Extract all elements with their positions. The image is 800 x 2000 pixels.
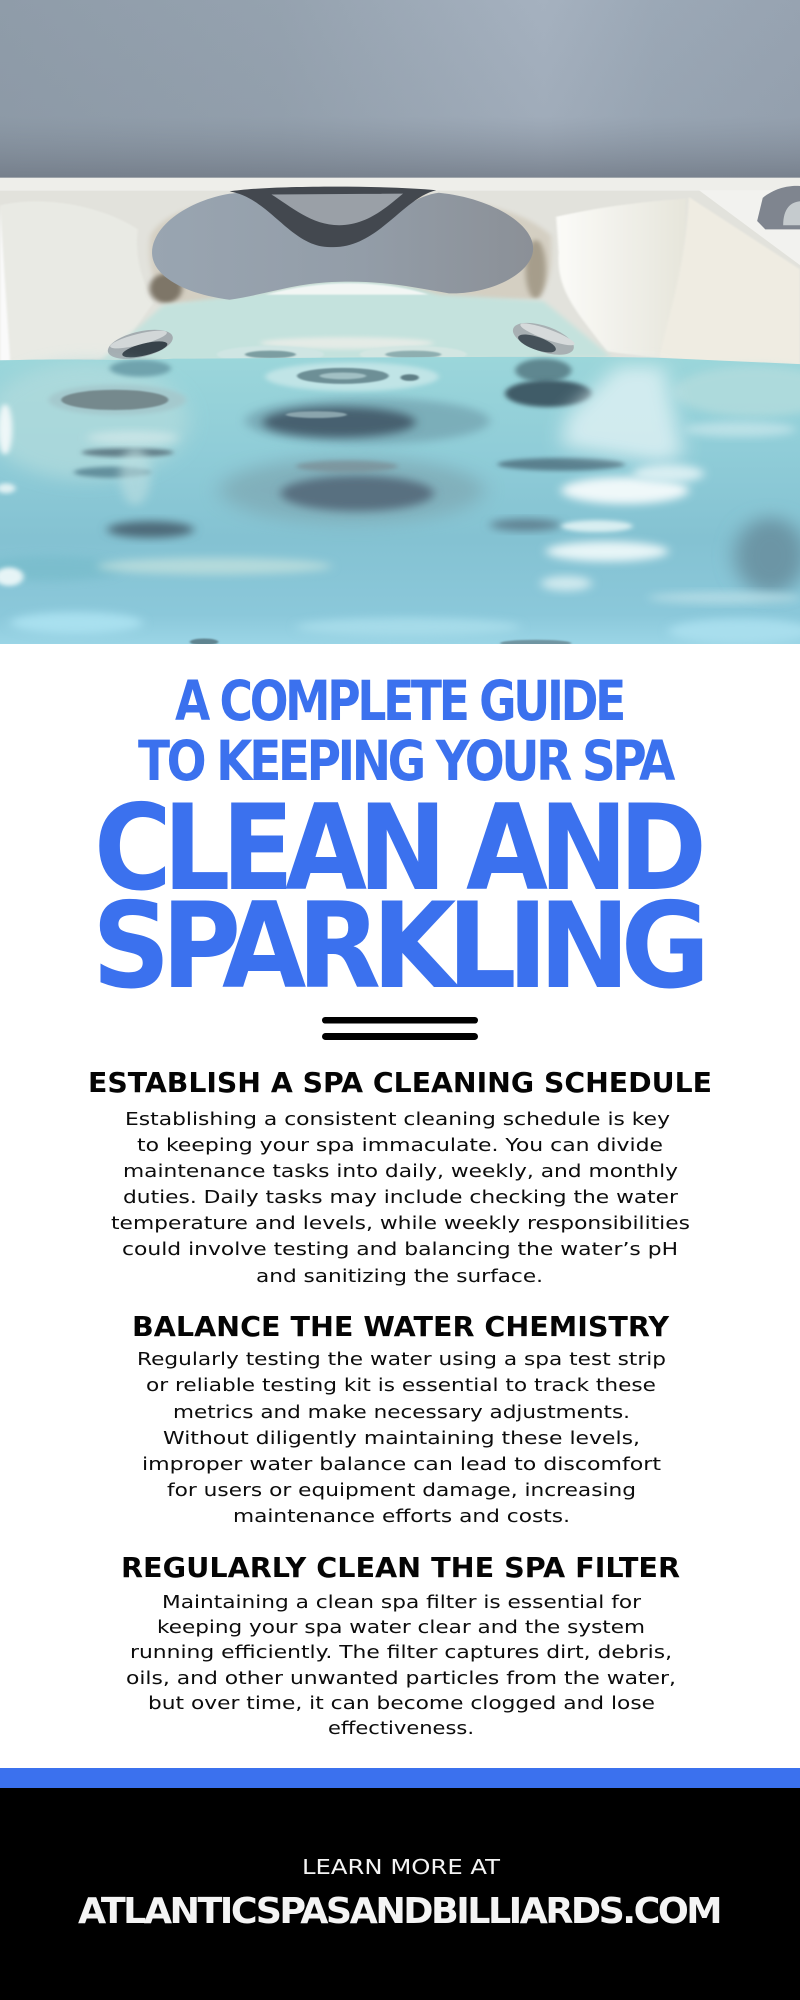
faucet fixture — [757, 186, 800, 229]
body text: Regularly testing the water using a spa test strip — [137, 1350, 666, 1370]
body text: for users or equipment damage, increasing — [167, 1481, 636, 1501]
footer background — [0, 1788, 800, 2000]
headrest — [152, 187, 533, 300]
body text — [111, 1110, 690, 1287]
double bar divider — [322, 1017, 478, 1040]
water surface — [0, 357, 800, 660]
body text: Establishing a consistent cleaning schedule is key — [125, 1110, 670, 1130]
right chrome jet — [507, 316, 579, 361]
body text: effectiveness. — [328, 1719, 474, 1739]
body text: or reliable testing kit is essential to track these — [146, 1376, 656, 1396]
body text: improper water balance can lead to discomfort — [142, 1455, 661, 1475]
body text: keeping your spa water clear and the system — [157, 1618, 645, 1638]
wall background — [0, 0, 800, 179]
learn more label: LEARN MORE AT — [302, 1855, 501, 1879]
title line: sparkling: SPARKLING — [92, 878, 702, 1016]
body text — [126, 1593, 676, 1739]
title — [92, 669, 702, 1016]
body text: running efficiently. The filter captures dirt, debris, — [130, 1643, 672, 1663]
white content panel — [0, 644, 800, 1768]
section: establish a spa cleaning schedule — [88, 1068, 712, 1287]
body text: oils, and other unwanted particles from the water, — [126, 1669, 676, 1689]
body text: maintenance tasks into daily, weekly, and monthly — [123, 1162, 678, 1182]
body text: maintenance efforts and costs. — [233, 1507, 570, 1527]
body text: could involve testing and balancing the water’s pH — [122, 1240, 678, 1260]
heading: ESTABLISH A SPA CLEANING SCHEDULE — [88, 1068, 712, 1099]
website url: ATLANTICSPASANDBILLIARDS.COM — [78, 1891, 720, 1932]
ripple rings above the waterline — [217, 346, 467, 363]
title line: clean and: CLEAN AND — [94, 780, 702, 918]
body text: Maintaining a clean spa filter is essential for — [162, 1593, 642, 1613]
heading: REGULARLY CLEAN THE SPA FILTER — [121, 1553, 680, 1584]
section: regularly clean the spa filter — [121, 1553, 680, 1739]
body text: Without diligently maintaining these levels, — [163, 1429, 640, 1449]
left chrome jet — [104, 324, 177, 365]
body text: temperature and levels, while weekly responsibilities — [111, 1214, 690, 1234]
body text: but over time, it can become clogged and lose — [148, 1694, 655, 1714]
body text: to keeping your spa immaculate. You can divide — [137, 1136, 663, 1156]
title line: to keeping your spa: TO KEEPING YOUR SPA — [138, 729, 676, 793]
section: balance the water chemistry — [132, 1312, 670, 1527]
tub shell — [0, 178, 800, 380]
body text: duties. Daily tasks may include checking the water — [123, 1188, 679, 1208]
heading: BALANCE THE WATER CHEMISTRY — [132, 1312, 670, 1343]
title line: a complete guide: A COMPLETE GUIDE — [175, 669, 623, 733]
body text: and sanitizing the surface. — [256, 1267, 543, 1287]
footer — [0, 1788, 800, 2000]
blue accent band — [0, 1768, 800, 1788]
body text: metrics and make necessary adjustments. — [173, 1403, 630, 1423]
hero photo: spa tub with headrest and water — [0, 0, 800, 644]
body text — [137, 1350, 666, 1527]
